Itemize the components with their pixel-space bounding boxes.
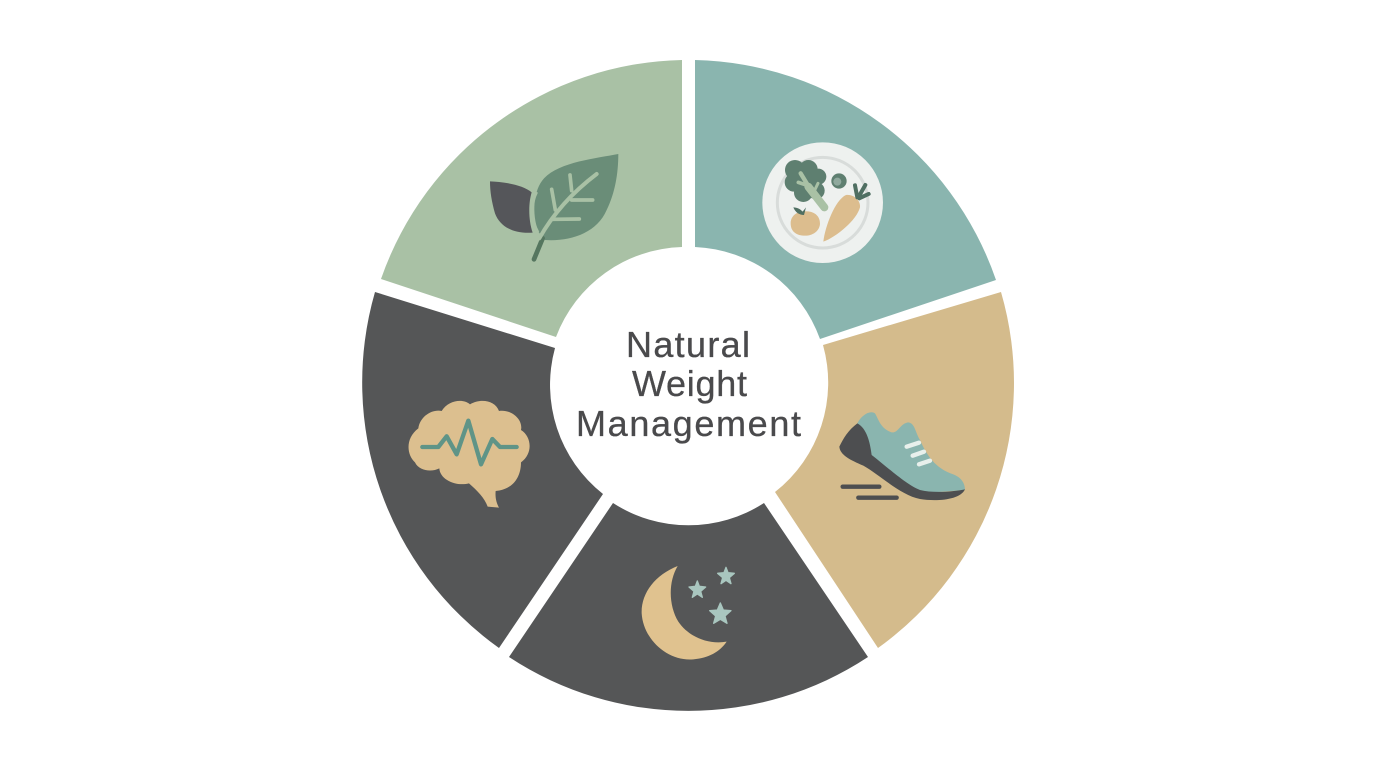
segment: nutrition (teal) (695, 60, 996, 339)
center title: Natural (626, 324, 750, 365)
segment: exercise (tan) (775, 292, 1014, 648)
icon: moon and stars (642, 566, 734, 659)
icon: plate of vegetables (762, 142, 883, 263)
segment: mind (dark) (362, 292, 603, 648)
segment: natural (green) (381, 60, 682, 337)
center title (576, 324, 801, 444)
icon: brain with pulse (409, 401, 530, 508)
segment: sleep (dark) (509, 503, 868, 711)
icon: leaves (490, 154, 618, 259)
icon: running shoe (839, 412, 965, 500)
center title: Management (576, 403, 801, 444)
center title: Weight (632, 363, 747, 404)
